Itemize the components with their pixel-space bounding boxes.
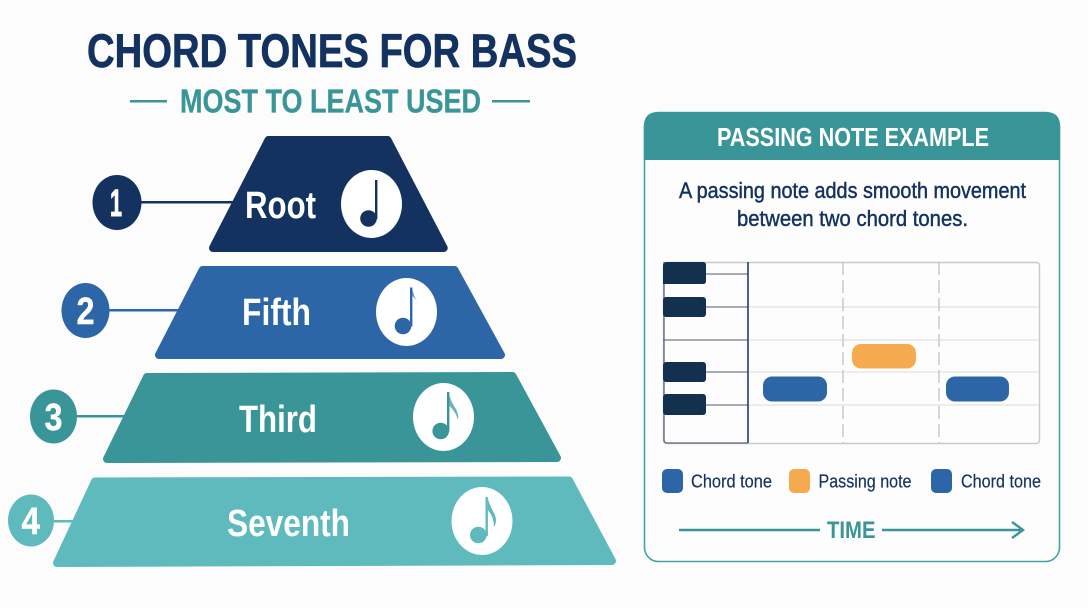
panel: passing note example	[644, 112, 1060, 562]
label seventh: Seventh	[227, 503, 350, 545]
panel frame	[644, 112, 1060, 562]
badge 1: 1	[110, 183, 122, 225]
connector 1	[140, 201, 234, 204]
time arrow	[679, 517, 1023, 544]
badge 3: 3	[44, 397, 62, 439]
legend: passing note: Passing note	[818, 471, 912, 491]
chord tone note 1	[763, 376, 827, 402]
legend: passing note	[789, 469, 912, 493]
description text: between two chord tones.	[737, 206, 968, 231]
time arrow: TIME	[827, 517, 876, 544]
icon: eighth note with long flag	[452, 487, 512, 555]
subtitle with dashes: MOST TO LEAST USED	[180, 82, 481, 120]
connector 3	[76, 415, 125, 418]
badge 2: 2	[76, 291, 94, 333]
panel heading: PASSING NOTE EXAMPLE	[717, 122, 989, 152]
pyramid tier 3: third	[30, 376, 557, 459]
badge 4	[8, 494, 54, 546]
passing note	[852, 344, 916, 368]
icon: eighth note with flag	[413, 383, 474, 451]
badge 2	[62, 283, 110, 338]
label root: Root	[245, 185, 316, 227]
legend: chord tone second: Chord tone	[961, 471, 1041, 491]
trapezoid 2	[159, 270, 501, 355]
trapezoid 4	[57, 480, 612, 563]
badge 3	[30, 390, 77, 444]
pyramid tier 1: root	[92, 140, 444, 248]
connector 2	[108, 309, 179, 312]
legend: chord tone	[662, 469, 772, 493]
badge 4: 4	[22, 501, 40, 543]
legend: chord tone: Chord tone	[691, 471, 772, 491]
grid	[663, 262, 1040, 444]
piano roll chart	[663, 262, 1040, 444]
pyramid tier 4: seventh	[8, 480, 612, 563]
badge 1	[92, 175, 142, 230]
trapezoid 1	[213, 140, 444, 248]
trapezoid 3	[107, 376, 557, 459]
description text: A passing note adds smooth movement	[679, 178, 1026, 203]
title: CHORD TONES FOR BASS	[87, 24, 577, 77]
description text	[679, 178, 1026, 231]
legend: chord tone second	[931, 469, 1041, 493]
piano black keys	[663, 262, 706, 415]
panel header	[644, 112, 1060, 160]
icon: eighth note	[376, 278, 437, 346]
icon: quarter note	[341, 170, 402, 238]
label third: Third	[239, 399, 317, 441]
chord tone note 2	[946, 376, 1009, 402]
pyramid tier 2: fifth	[62, 270, 501, 355]
legend	[662, 469, 1041, 493]
label fifth: Fifth	[242, 292, 311, 334]
connector 4	[53, 520, 74, 522]
